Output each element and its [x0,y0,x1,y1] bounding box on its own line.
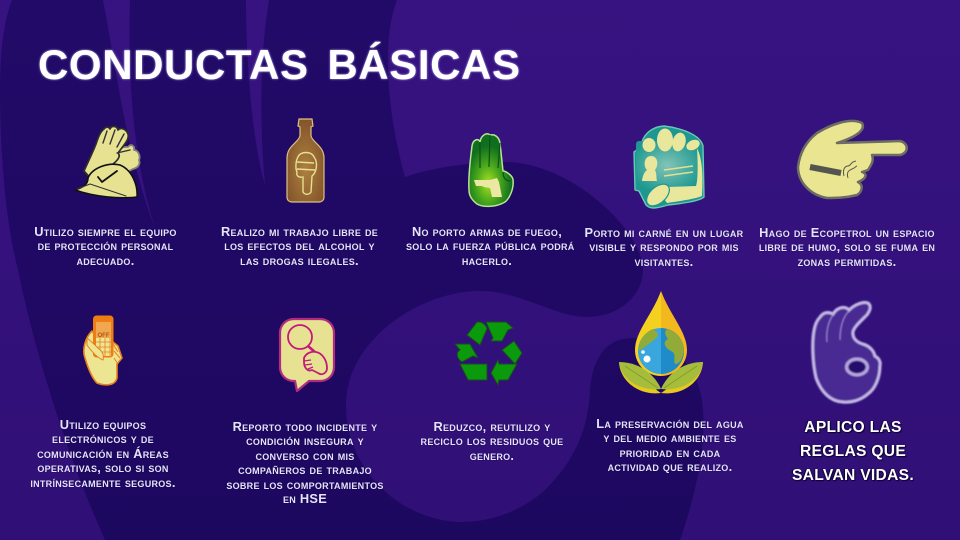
text: SALVAN VIDAS. [792,467,914,484]
panel: reporto incidentes [226,318,384,506]
text: REGLAS QUE [800,443,906,460]
icon: gloves and helmet [74,126,141,198]
icon: hand holding phone: OFF [98,333,110,339]
text: Hago de Ecopetrol un espacio [759,225,935,240]
panel: armas de fuego [406,133,575,268]
text: condición insegura y [246,433,364,448]
text: Utilizo siempre el equipo [34,224,177,239]
text: solo la fuerza pública podrá [406,238,575,253]
panel: agua y medio ambiente [596,291,744,474]
text: los efectos del alcohol y [224,238,375,253]
text: compañeros de trabajo [238,462,372,477]
text: Reduzco, reutilizo y [433,419,550,434]
text: APLICO LAS [804,419,902,436]
text: de protección personal [38,238,173,253]
text [30,417,176,490]
text [34,224,177,268]
text [420,419,563,463]
icon: bottle with thumb down [286,118,325,203]
text: Realizo mi trabajo libre de [221,224,378,239]
text: hacerlo. [462,253,512,268]
text: reciclo los residuos que [421,433,563,448]
text: Utilizo equipos [60,417,146,432]
text: en HSE [283,491,327,506]
text: y del medio ambiente es [603,430,737,445]
icon: speech bubble with magnifier [278,318,336,392]
text: No porto armas de fuego, [412,224,562,239]
text: converso con mis [255,448,355,463]
text: intrínsecamente seguros. [30,475,176,490]
panel: reciclaje [420,321,563,463]
text: genero. [470,448,514,463]
panel: reglas que salvan vidas [791,300,914,484]
text: visible y respondo por mis [589,239,739,254]
panel: equipo de protección [34,126,177,268]
icon: card held by hand [633,125,705,209]
text [226,419,384,506]
icon: pointing hand with cigarette [796,120,908,200]
text [585,225,743,269]
text: visitantes. [634,254,693,269]
icon: OK hand [810,300,883,405]
panel: libre de humo [759,120,935,269]
text: Porto mi carné en un lugar [585,225,743,240]
panel: equipos electrónicos [30,316,176,490]
panel: alcohol y drogas [221,118,378,268]
text: actividad que realizo. [608,459,732,474]
text: zonas permitidas. [798,254,896,269]
text [406,224,575,268]
text: libre de humo, solo se fuma en [759,239,935,254]
icon: water drop with globe and leaves [619,291,703,394]
text [791,419,914,484]
text [759,225,935,269]
icon: green hand with gun [468,133,514,208]
text [221,224,378,268]
text: las drogas ilegales. [240,253,359,268]
text: La preservación del agua [596,416,744,431]
text: Reporto todo incidente y [233,419,377,434]
text: sobre los comportamientos [226,477,384,492]
text: prioridad en cada [620,445,720,460]
text: electrónicos y de [52,431,154,446]
text: operativas, solo si son [37,460,169,475]
text: comunicación en Áreas [37,446,169,461]
icon: hand holding phone [83,316,123,386]
text: adecuado. [76,253,135,268]
panel: carné [585,125,743,269]
title: CONDUCTAS BÁSICAS [38,41,521,88]
text [596,416,744,474]
icon: recycling arrows [454,321,522,386]
